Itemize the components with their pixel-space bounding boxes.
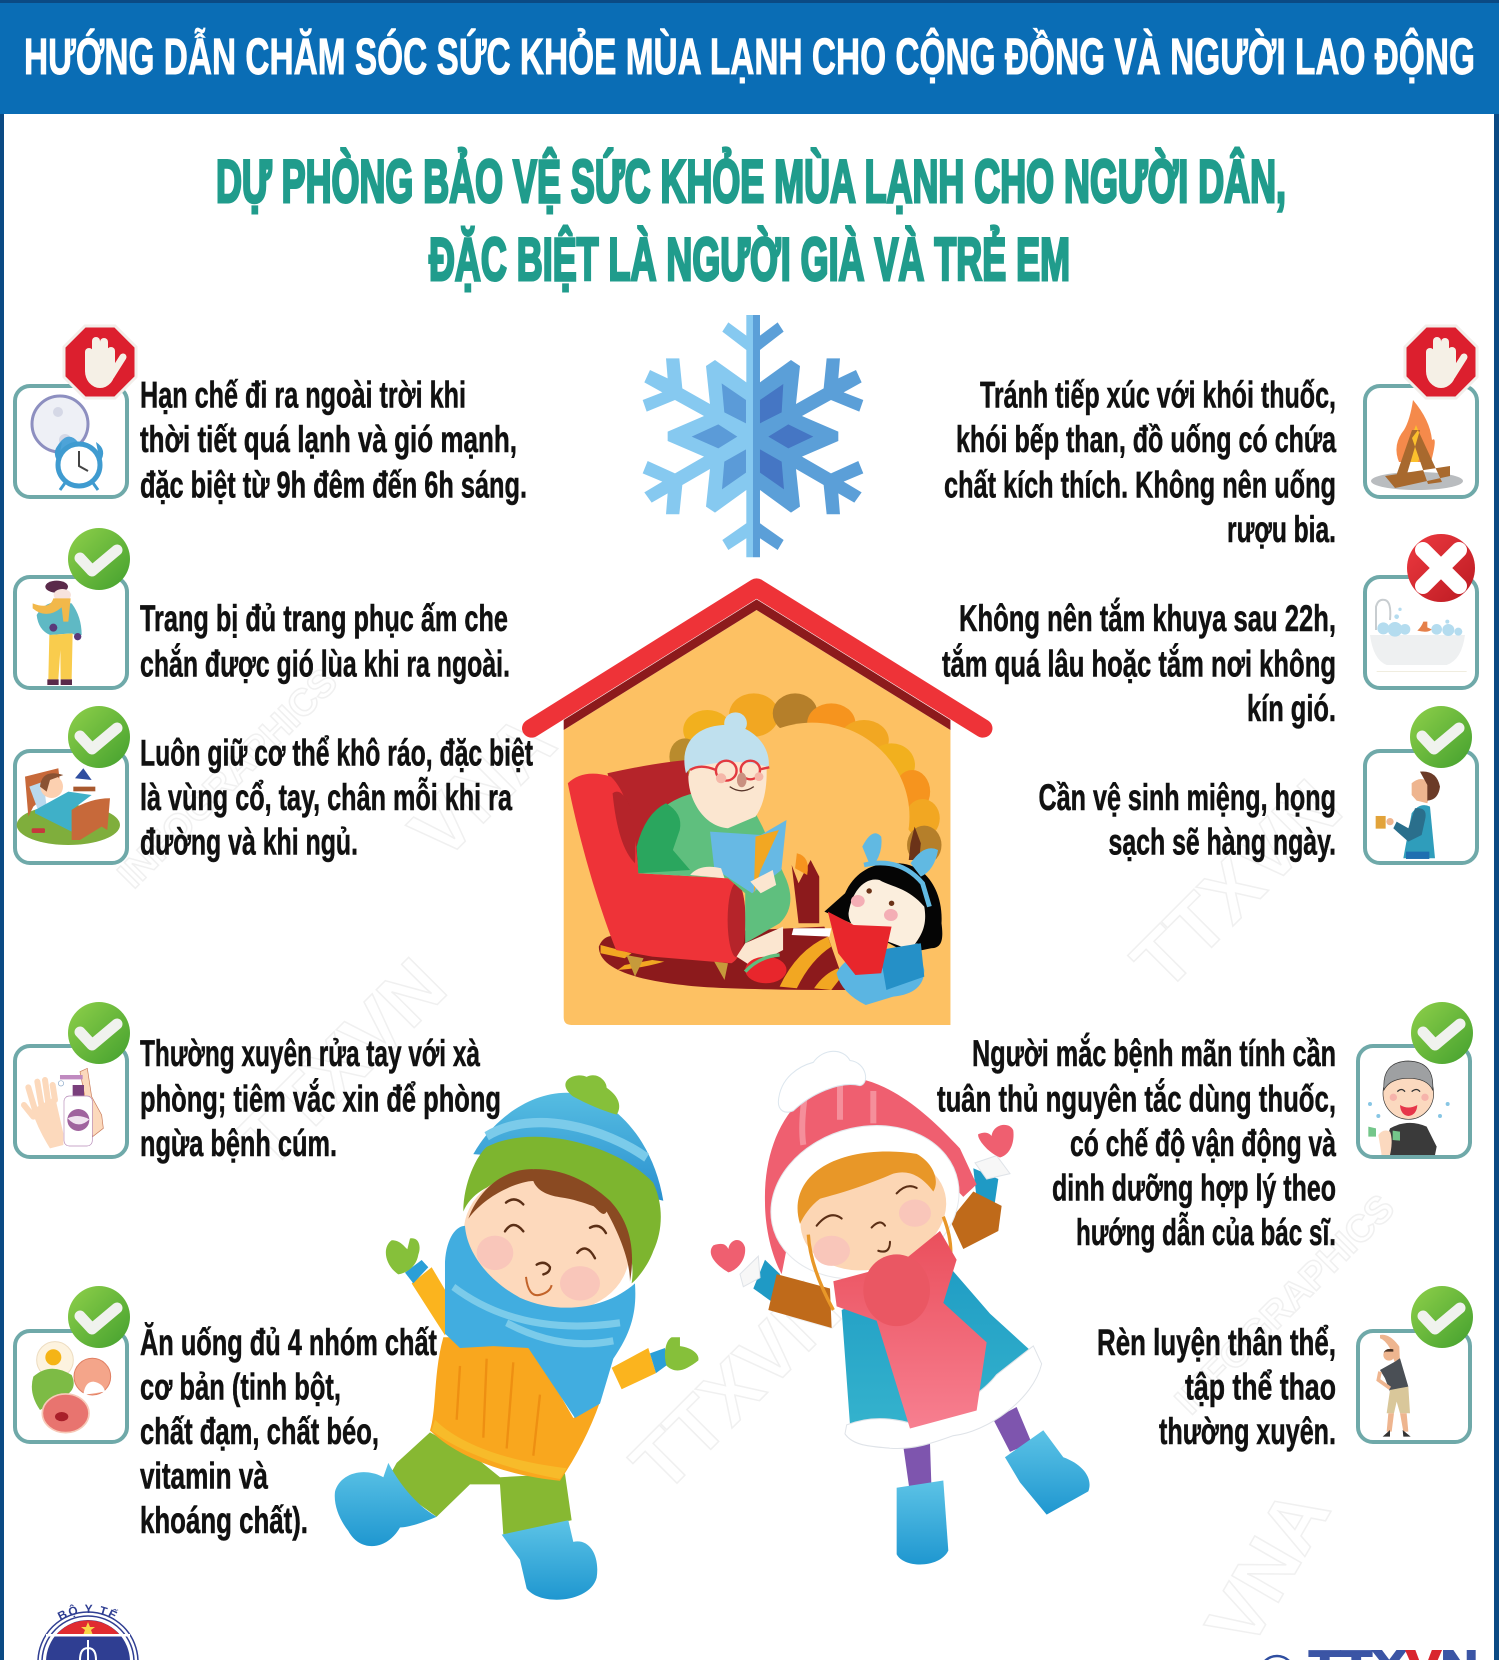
illustration: boy in winter clothes bbox=[335, 1075, 699, 1600]
check badge right 4 bbox=[1411, 1002, 1473, 1064]
text block right 5: thường xuyên. bbox=[1159, 1411, 1336, 1452]
check badge right 3 bbox=[1410, 706, 1472, 768]
text block right 2: kín gió. bbox=[1247, 688, 1336, 729]
item card right 3: oral hygiene bbox=[1365, 751, 1477, 863]
text block right 3: sạch sẽ hàng ngày. bbox=[1108, 822, 1336, 862]
text block left 4: Thường xuyên rửa tay với xà bbox=[140, 1033, 480, 1074]
item card right 2: late baths bbox=[1365, 577, 1477, 688]
watermarks: INFOGRAPHICS bbox=[1167, 1187, 1403, 1423]
icon: campfire bbox=[1371, 400, 1463, 490]
grandmother bbox=[637, 793, 790, 943]
rug bbox=[599, 927, 847, 990]
text block left 1: Hạn chế đi ra ngoài trời khi bbox=[140, 374, 466, 416]
cross badge right 2 bbox=[1407, 534, 1475, 602]
text block left 3: Luôn giữ cơ thể khô ráo, đặc biệt bbox=[140, 732, 533, 774]
icon: food groups bbox=[32, 1342, 111, 1433]
icon: person in warm clothes bbox=[33, 581, 82, 685]
text block left 1: thời tiết quá lạnh và gió mạnh, bbox=[140, 419, 517, 460]
text block left 4: phòng; tiêm vắc xin để phòng bbox=[140, 1078, 501, 1120]
icon: child in bed bbox=[17, 768, 120, 845]
check badge left 4 bbox=[68, 1002, 130, 1064]
text block left 2: Trang bị đủ trang phục ấm che bbox=[140, 598, 508, 639]
text block left 3: đường và khi ngủ. bbox=[140, 822, 358, 862]
text block left 5: chất đạm, chất béo, bbox=[140, 1411, 379, 1452]
text block right 1: rượu bia. bbox=[1227, 509, 1336, 550]
icon: bathtub bbox=[1370, 600, 1467, 672]
watermarks: TTXVN bbox=[219, 941, 462, 1184]
item card right 1: smoke and stimulants bbox=[1365, 386, 1477, 497]
watermarks: TTXVN bbox=[1115, 763, 1358, 1006]
check badge left 3 bbox=[68, 706, 130, 768]
subtitle: ĐẶC BIỆT LÀ NGƯỜI GIÀ VÀ TRẺ EM bbox=[429, 226, 1070, 293]
header band with main title bbox=[0, 0, 1499, 114]
logo: Ministry of Health: BỘ Y TẾ bbox=[57, 1604, 118, 1620]
check badge left 2 bbox=[68, 528, 130, 590]
icon: man stretching bbox=[1378, 1335, 1411, 1437]
fireplace bbox=[792, 860, 819, 923]
subtitle bbox=[216, 148, 1286, 293]
stop sign left bbox=[64, 326, 136, 398]
text block right 4: hướng dẫn của bác sĩ. bbox=[1076, 1212, 1336, 1253]
watermarks: VNA bbox=[393, 697, 571, 876]
text block right 1: Tránh tiếp xúc với khói thuốc, bbox=[980, 374, 1336, 416]
illustration: house with grandmother and child reading bbox=[532, 588, 983, 1025]
icon: hands and soap bottle bbox=[24, 1068, 103, 1148]
text block right 3: Cần vệ sinh miệng, họng bbox=[1038, 777, 1336, 818]
item card left 2: warm clothing bbox=[15, 577, 127, 688]
logo: Ministry of Health bbox=[37, 1604, 139, 1660]
text block right 4: tuân thủ nguyên tắc dùng thuốc, bbox=[937, 1078, 1336, 1120]
icon: snowflake bbox=[643, 315, 863, 557]
text block left 4: ngừa bệnh cúm. bbox=[140, 1123, 337, 1164]
illustration: girl in winter clothes bbox=[711, 1051, 1090, 1564]
text block right 2: Không nên tắm khuya sau 22h, bbox=[959, 597, 1336, 639]
text block left 3: là vùng cổ, tay, chân mỗi khi ra bbox=[140, 777, 512, 818]
text block right 2: tắm quá lâu hoặc tắm nơi không bbox=[942, 642, 1336, 684]
watermarks: TTXVN bbox=[614, 1265, 857, 1508]
text block right 4: dinh dưỡng hợp lý theo bbox=[1052, 1168, 1336, 1208]
text block right 5: Rèn luyện thân thể, bbox=[1097, 1322, 1336, 1363]
item card left 4: hand washing bbox=[15, 1046, 127, 1157]
watermarks bbox=[110, 661, 1403, 1660]
armchair bbox=[607, 760, 694, 873]
item card left 3: keep body dry bbox=[15, 751, 127, 863]
icon: man gargling bbox=[1376, 771, 1440, 859]
check badge left 5 bbox=[68, 1286, 130, 1348]
text block left 5: Ăn uống đủ 4 nhóm chất bbox=[140, 1322, 437, 1363]
item card left 5: balanced diet bbox=[15, 1331, 127, 1442]
item card right 4: chronic illness bbox=[1358, 1046, 1470, 1157]
text block right 4: có chế độ vận động và bbox=[1070, 1123, 1336, 1164]
item card right 5: physical exercise bbox=[1358, 1331, 1470, 1442]
watermarks: VNA bbox=[1188, 1474, 1347, 1660]
text block left 1: đặc biệt từ 9h đêm đến 6h sáng. bbox=[140, 464, 527, 506]
text block left 5: khoáng chất). bbox=[140, 1500, 308, 1541]
icon: elderly man with dumbbell bbox=[1368, 1061, 1450, 1155]
child bbox=[824, 863, 942, 953]
text block right 5: tập thể thao bbox=[1185, 1366, 1336, 1408]
text block right 4: Người mắc bệnh mãn tính cần bbox=[972, 1032, 1336, 1074]
text block left 5: cơ bản (tinh bột, bbox=[140, 1366, 341, 1408]
item card left 1: limit going out at night bbox=[15, 386, 127, 497]
check badge right 5 bbox=[1411, 1286, 1473, 1348]
watermarks: INFOGRAPHICS bbox=[110, 661, 346, 897]
fireplace arch bbox=[669, 693, 941, 911]
icon: moon and alarm clock bbox=[32, 396, 103, 490]
stop sign right bbox=[1405, 326, 1477, 398]
text block left 2: chắn được gió lùa khi ra ngoài. bbox=[140, 642, 510, 684]
text block left 5: vitamin và bbox=[140, 1456, 268, 1496]
